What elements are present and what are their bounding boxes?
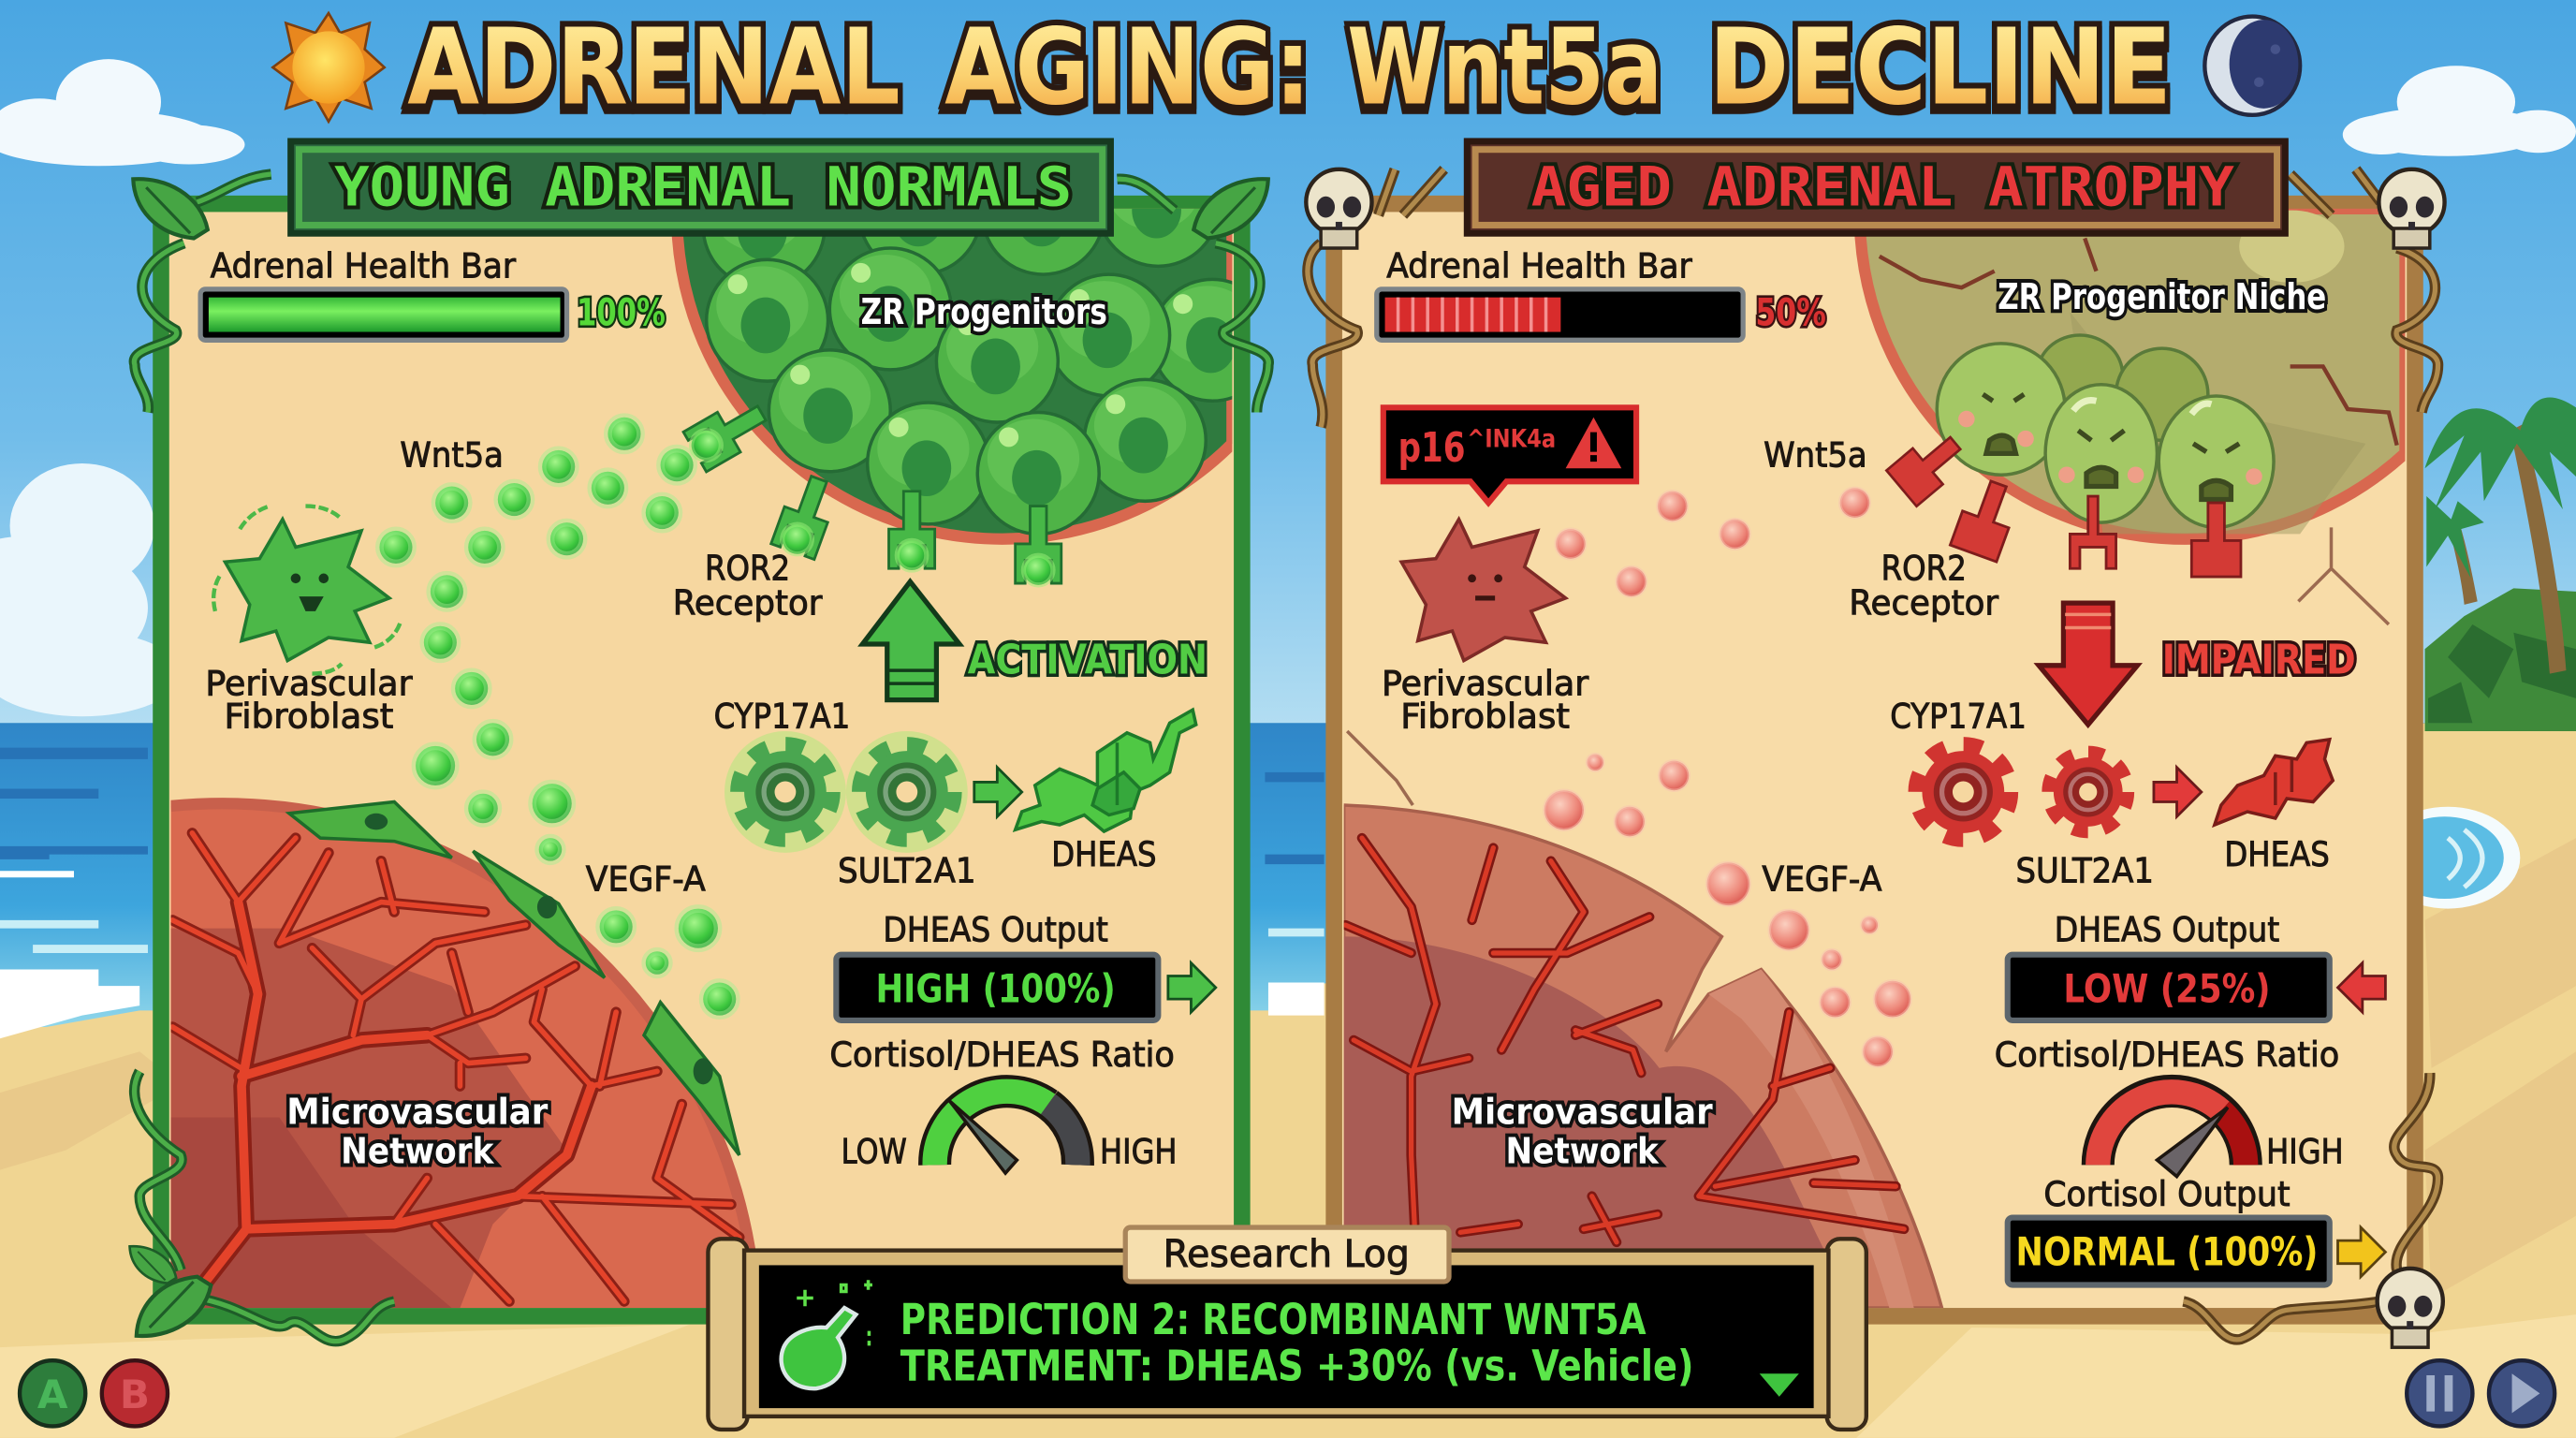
log text: TREATMENT: DHEAS +30% (vs. Vehicle) <box>900 1341 1694 1390</box>
banner: young <box>291 141 1110 233</box>
ROR2 label: ROR2 <box>1881 549 1967 589</box>
button B <box>102 1360 168 1426</box>
tide pool <box>2376 807 2520 909</box>
impaired label: IMPAIRED <box>2162 637 2356 684</box>
ZR niche label: ZR Progenitor Niche <box>1998 276 2326 318</box>
panel: young adrenal <box>128 141 1273 1353</box>
button A <box>20 1360 85 1426</box>
cortisol output box <box>2008 1218 2330 1284</box>
DHEAS output label: DHEAS Output <box>883 910 1108 950</box>
gauge high label: HIGH <box>2266 1132 2344 1172</box>
health bar <box>200 289 567 340</box>
VEGF-A label: VEGF-A <box>1762 858 1881 899</box>
health percent: 50% <box>1755 291 1826 335</box>
microvascular label: Network <box>341 1131 495 1173</box>
DHEAS molecule <box>1016 710 1196 831</box>
ZR niche <box>1860 209 2405 539</box>
panel frame <box>161 204 1242 1316</box>
gauge scale labels <box>842 1132 1178 1172</box>
background: sand <box>0 723 2576 1438</box>
microvascular label <box>286 1091 548 1173</box>
arrow to DHEAS <box>2154 768 2202 816</box>
wnt5a label: Wnt5a <box>1764 434 1867 475</box>
continue marker <box>1760 1373 1799 1397</box>
ROR2 label: Receptor <box>1849 582 1999 623</box>
arrow to DHEAS <box>974 768 1022 816</box>
health bar <box>1377 289 1743 340</box>
SULT2A1 label: SULT2A1 <box>2016 850 2154 890</box>
arrow: cortisol normal <box>2338 1227 2385 1277</box>
cortisol output box: NORMAL (100%) <box>2016 1228 2318 1274</box>
DHEAS output box <box>836 955 1158 1020</box>
cloud upper left <box>0 59 245 166</box>
log tab <box>1125 1227 1449 1282</box>
foam stripes <box>0 871 1325 1038</box>
cracks <box>1347 527 2389 805</box>
arrow: output low <box>2338 962 2385 1012</box>
microvascular label: Microvascular <box>286 1091 548 1133</box>
background: sea <box>0 723 2576 1027</box>
microvascular label: Network <box>1506 1131 1660 1173</box>
panel frame <box>1334 204 2415 1316</box>
icon: moon <box>2204 17 2300 115</box>
fibroblast label: Fibroblast <box>225 697 393 737</box>
cortisol output label: Cortisol Output <box>2043 1174 2291 1214</box>
log frame <box>744 1251 1828 1416</box>
button play <box>2489 1360 2554 1426</box>
DHEAS output box: LOW (25%) <box>2063 966 2271 1012</box>
log text: PREDICTION 2: RECOMBINANT WNT5A <box>900 1295 1647 1344</box>
banner: young: YOUNG ADRENAL NORMALS <box>334 154 1072 218</box>
endothelial cells <box>289 801 739 1155</box>
gear SULT2A1 <box>846 731 968 853</box>
p16 alert: p16 <box>1398 424 1466 472</box>
DHEAS label: DHEAS <box>1051 834 1157 874</box>
title <box>407 7 2172 129</box>
gear CYP17A1 <box>1919 748 2008 836</box>
cloud upper right <box>2343 66 2576 156</box>
panel: aged adrenal <box>1306 141 2445 1347</box>
banner: aged <box>1467 141 2285 233</box>
button pause <box>2407 1360 2472 1426</box>
DHEAS molecule <box>2215 740 2333 825</box>
button A: A <box>37 1372 68 1417</box>
research log <box>708 1227 1866 1430</box>
title: Wnt5a <box>1347 7 1662 129</box>
arrow: output high <box>1168 962 1216 1012</box>
health bar label: Adrenal Health Bar <box>1386 246 1693 286</box>
wnt5a label: Wnt5a <box>400 434 504 475</box>
pink signal dots <box>1544 488 1910 1066</box>
DHEAS output box: HIGH (100%) <box>875 966 1116 1012</box>
ROR2 label <box>1849 549 1999 623</box>
log screen <box>759 1265 1814 1408</box>
banner: aged: AGED ADRENAL ATROPHY <box>1531 154 2234 218</box>
ZR progenitors label: ZR Progenitors <box>861 291 1107 333</box>
arrow: impaired down <box>2039 603 2137 725</box>
ratio label: Cortisol/DHEAS Ratio <box>829 1034 1175 1075</box>
fibroblast label <box>205 663 413 737</box>
DHEAS label: DHEAS <box>2224 834 2330 874</box>
gear CYP17A1 <box>724 731 846 853</box>
health percent: 100% <box>577 291 666 335</box>
icon: sun <box>272 13 385 122</box>
scroll rods <box>708 1239 1866 1430</box>
ratio label: Cortisol/DHEAS Ratio <box>1995 1034 2339 1075</box>
gauge <box>935 1092 1077 1173</box>
CYP17A1 label: CYP17A1 <box>714 697 850 737</box>
p16 alert <box>1383 407 1636 503</box>
CYP17A1 label: CYP17A1 <box>1890 697 2027 737</box>
VEGF-A label: VEGF-A <box>586 858 706 899</box>
senescent cells <box>1937 335 2274 527</box>
vines <box>134 174 1268 1342</box>
fibroblast <box>1401 520 1566 661</box>
title: ADRENAL <box>407 7 900 129</box>
p16 alert: ^INK4a <box>1467 425 1556 453</box>
fibroblast label: Fibroblast <box>1400 697 1570 737</box>
arrow: activation up <box>862 581 959 700</box>
gauge scale labels: LOW <box>842 1132 907 1172</box>
DHEAS output label: DHEAS Output <box>2055 910 2279 950</box>
microvascular label <box>1452 1091 1713 1173</box>
fibroblast label: Perivascular <box>1382 663 1589 703</box>
fibroblast label: Perivascular <box>205 663 413 703</box>
gauge scale labels: HIGH <box>1100 1132 1178 1172</box>
icon: potion <box>782 1280 872 1388</box>
ZR progenitor cluster <box>672 208 1232 545</box>
health bar label: Adrenal Health Bar <box>211 246 517 286</box>
SULT2A1 label: SULT2A1 <box>838 850 976 890</box>
receptors <box>682 393 1061 585</box>
gauge <box>2098 1091 2246 1177</box>
microvascular label: Microvascular <box>1452 1091 1713 1133</box>
button B: B <box>120 1372 150 1417</box>
title: DECLINE <box>1708 7 2172 129</box>
palm island <box>2425 397 2576 731</box>
dead vines <box>1308 169 2438 1340</box>
leaves <box>128 162 1270 1353</box>
ROR2 label <box>673 549 823 623</box>
cloud lower left <box>0 463 181 716</box>
ROR2 label: Receptor <box>673 582 823 623</box>
log tab: Research Log <box>1164 1232 1410 1276</box>
DHEAS output box <box>2008 955 2330 1020</box>
fibroblast label <box>1382 663 1589 737</box>
microvascular network <box>171 803 756 1308</box>
log text <box>900 1295 1694 1390</box>
background: sky <box>0 0 2576 731</box>
title: AGING: <box>944 7 1311 129</box>
ROR2 label: ROR2 <box>705 549 790 589</box>
receptors <box>1886 425 2241 577</box>
wnt5a and VEGF signal dots <box>379 418 736 1016</box>
microvascular network damaged <box>1344 805 1942 1308</box>
fibroblast <box>213 506 401 674</box>
gear SULT2A1 <box>2051 755 2126 829</box>
activation label: ACTIVATION <box>968 637 1208 684</box>
skulls <box>1306 169 2445 1347</box>
